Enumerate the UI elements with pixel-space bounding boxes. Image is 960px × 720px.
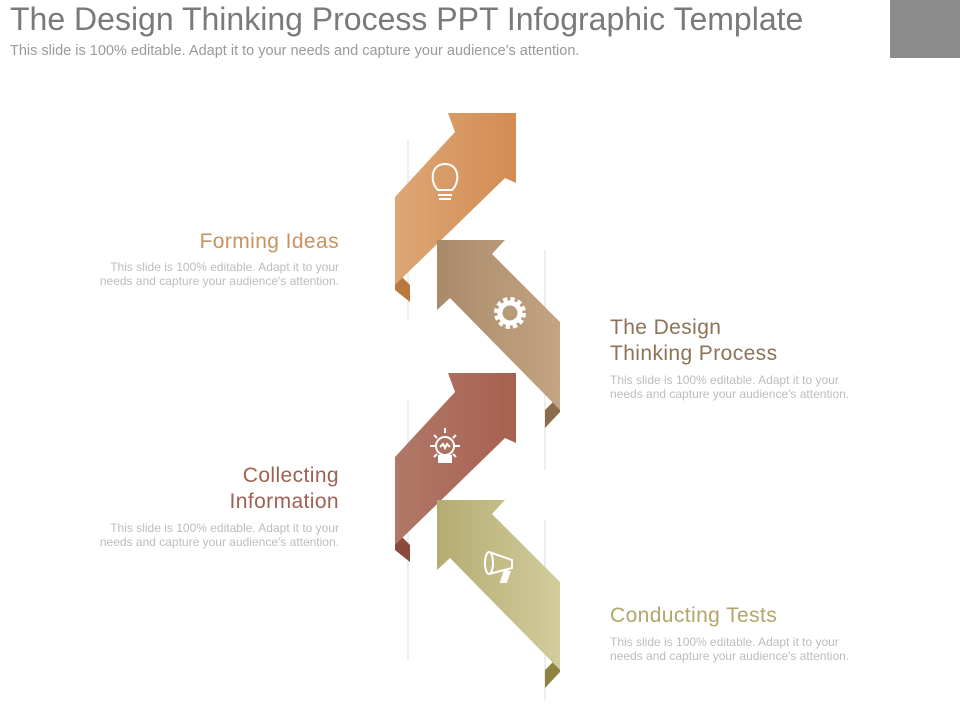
text: collecting information: Information: [230, 490, 339, 513]
icon: megaphone: [485, 552, 512, 582]
text: design thinking process: This slide is 100% editable. Adapt it to your: [610, 373, 839, 387]
text: conducting tests: needs and capture your audience's attention.: [610, 649, 849, 663]
text: design thinking process: needs and capture your audience's attention.: [610, 387, 849, 401]
corner block: [890, 0, 960, 58]
title: The Design Thinking Process PPT Infographic Template: [10, 1, 803, 37]
text: conducting tests: This slide is 100% editable. Adapt it to your: [610, 635, 839, 649]
text: forming ideas: [100, 230, 339, 288]
icon: light bulb: [433, 164, 457, 199]
icon: idea bulb: [430, 428, 460, 462]
arrow 1: forming ideas: [395, 113, 516, 302]
text: design thinking process: The Design: [610, 316, 721, 339]
icon: gear: [497, 300, 523, 326]
text: design thinking process: Thinking Process: [610, 342, 777, 365]
text: collecting information: [100, 464, 339, 549]
text: forming ideas: This slide is 100% editable. Adapt it to your: [110, 260, 339, 274]
text: conducting tests: [610, 604, 849, 663]
text: collecting information: needs and capture your audience's attention.: [100, 535, 339, 549]
text: forming ideas: needs and capture your audience's attention.: [100, 274, 339, 288]
arrow 2: design thinking process: [437, 240, 560, 428]
text: conducting tests: Conducting Tests: [610, 604, 777, 627]
text: collecting information: Collecting: [243, 464, 339, 487]
subtitle: This slide is 100% editable. Adapt it to your needs and capture your audience's attention.: [10, 43, 579, 59]
text: design thinking process: [610, 316, 849, 401]
text: forming ideas: Forming Ideas: [200, 230, 339, 253]
arrow 3: collecting information: [395, 373, 516, 562]
arrow 4: conducting tests: [437, 500, 560, 688]
text: collecting information: This slide is 100% editable. Adapt it to your: [110, 521, 339, 535]
